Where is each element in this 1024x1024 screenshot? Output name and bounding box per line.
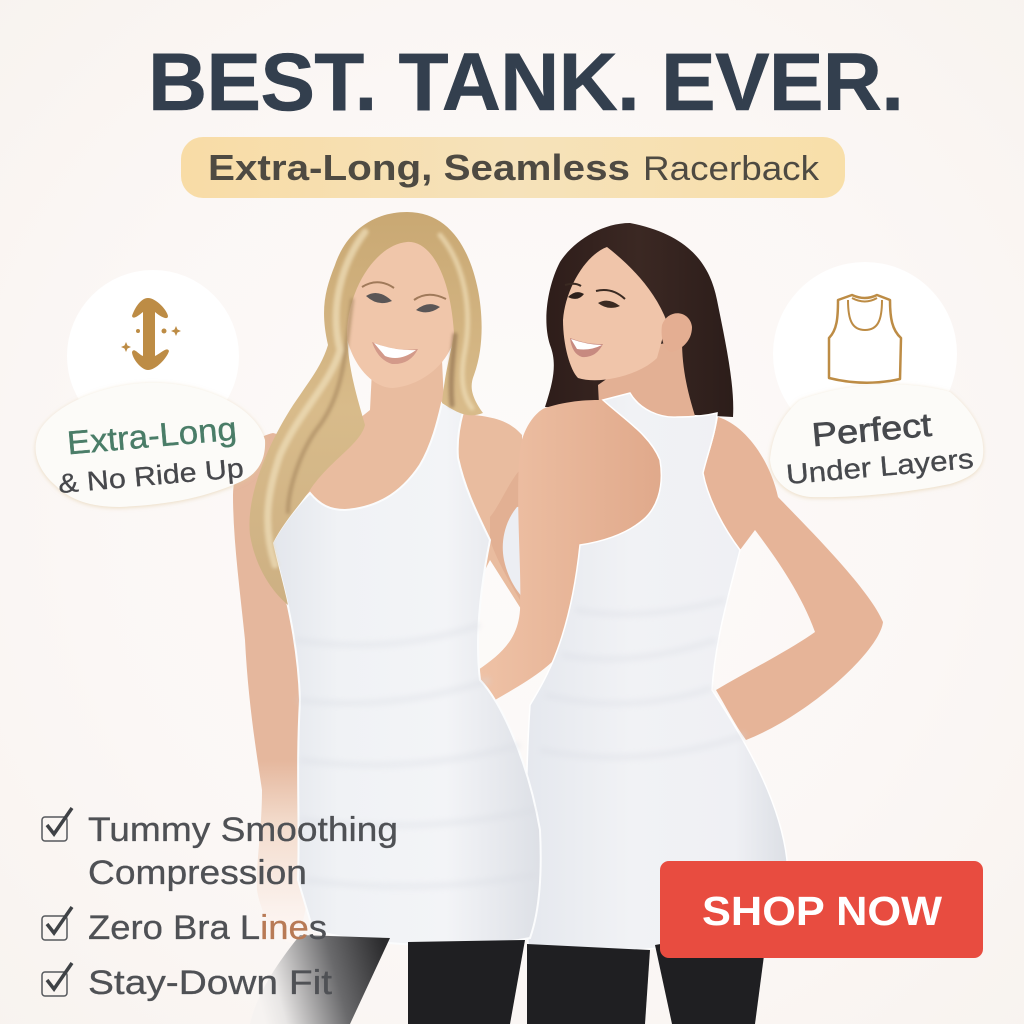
badge circle bbox=[67, 270, 239, 442]
button: shop now: SHOP NOW bbox=[702, 888, 942, 934]
badge text: Extra-Long bbox=[65, 410, 238, 461]
left woman smile bbox=[372, 342, 418, 364]
right woman hair bbox=[545, 223, 733, 417]
right woman eyes bbox=[565, 284, 625, 308]
left woman face bbox=[346, 240, 455, 388]
right woman smile bbox=[570, 338, 603, 357]
check item 3: Stay-Down Fit bbox=[88, 964, 333, 1002]
badge: perfect under layers: Under Layers bbox=[785, 443, 975, 490]
badge: extra-long bbox=[36, 270, 265, 507]
right woman tank wrinkles bbox=[540, 600, 745, 757]
check item 1: Tummy Smoothing bbox=[88, 811, 398, 849]
title: BEST. TANK. EVER. bbox=[148, 37, 904, 128]
icon: up-down arrow bbox=[121, 298, 181, 370]
left woman leggings bbox=[250, 935, 525, 1024]
right woman face bbox=[563, 247, 667, 380]
right woman leggings bbox=[527, 925, 768, 1024]
check item 1 bbox=[42, 808, 398, 892]
subtitle pill: Racerback bbox=[643, 150, 820, 188]
right woman ear bbox=[662, 313, 692, 352]
right woman bust bbox=[503, 505, 530, 600]
icon: tank top bbox=[829, 295, 901, 383]
badge circle bbox=[773, 262, 957, 446]
right woman right arm bbox=[703, 417, 883, 740]
left woman tank bbox=[272, 403, 541, 945]
right woman tank bbox=[526, 393, 787, 951]
checklist bbox=[42, 808, 398, 1002]
subtitle pill: Extra-Long, Seamless bbox=[208, 147, 630, 188]
right woman neck bbox=[598, 340, 698, 425]
left woman eyes bbox=[362, 282, 446, 312]
left woman hair bbox=[249, 212, 483, 605]
badge label background bbox=[36, 383, 265, 507]
button: shop now bbox=[660, 861, 983, 958]
left woman neck, chest, shoulder bbox=[290, 360, 528, 620]
right woman upper back and arm bbox=[478, 400, 661, 700]
left woman tank wrinkles bbox=[295, 625, 535, 886]
figures: two women bbox=[233, 212, 883, 1024]
right woman bbox=[478, 223, 883, 1024]
left woman arm bbox=[233, 433, 330, 943]
badge text: Perfect bbox=[810, 406, 933, 453]
check item 1: Compression bbox=[88, 854, 307, 892]
subtitle pill bbox=[181, 137, 845, 198]
left woman armpit shade bbox=[490, 470, 520, 600]
badge: perfect under layers bbox=[770, 262, 983, 497]
left woman hair highlights bbox=[268, 232, 472, 565]
badge: extra-long: & No Ride Up bbox=[57, 453, 245, 499]
check item 2: Zero Bra L ines bbox=[88, 909, 327, 947]
badge label background bbox=[770, 384, 983, 497]
